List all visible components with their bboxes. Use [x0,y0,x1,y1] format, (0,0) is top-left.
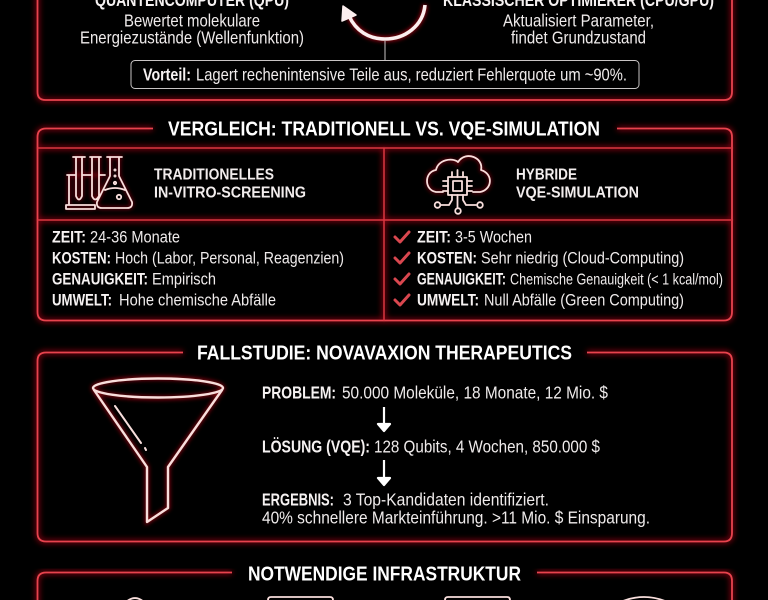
text: result: 3 Top-Kandidaten identifiziert. [343,490,549,510]
heading: hybrid simulation: HYBRIDE [516,166,577,184]
callout: advantage: Vorteil: [143,64,191,84]
arrow: problem to solution [378,407,390,431]
callout: advantage [131,60,639,88]
list: VQE facts: Chemische Genauigkeit (< 1 kcal/mol) [510,272,723,288]
text: solution: LÖSUNG (VQE): [262,436,370,456]
panel: infrastructure [38,562,732,600]
callout: advantage: Lagert rechenintensive Teile aus, reduziert Fehlerquote um ~90%. [196,64,627,84]
list: traditional facts: UMWELT: [52,292,112,310]
list: traditional facts: ZEIT: [52,228,86,246]
text: result: ERGEBNIS: [262,490,334,510]
text: problem: 50.000 Moleküle, 18 Monate, 12 Mio. $ [342,382,608,402]
icon: test tubes and flask [66,157,132,209]
heading: case study: FALLSTUDIE: NOVAVAXION THERAPEUTICS [197,342,572,364]
list: VQE facts: Null Abfälle (Green Computing) [484,290,684,310]
heading: traditional screening: TRADITIONELLES [154,166,274,184]
icon: check marks [395,232,409,305]
heading: hybrid simulation [516,166,639,202]
icon: funnel [93,378,223,522]
text: classical optimizer [443,0,714,48]
list: VQE facts: KOSTEN: [417,250,477,268]
icon: infrastructure tops [125,597,665,600]
list: traditional facts: Empirisch [152,270,216,288]
list: traditional facts: KOSTEN: [52,250,111,268]
heading: comparison: VERGLEICH: TRADITIONELL VS. VQE-SIMULATION [168,118,600,140]
text: quantum computer [80,0,304,48]
heading: traditional screening: IN-VITRO-SCREENING [154,184,306,202]
text: solution [262,436,600,456]
list: traditional facts [52,228,344,310]
text: result [262,490,650,528]
text: quantum computer: Bewertet molekulare [124,10,260,30]
text: quantum computer: Energiezustände (Wellenfunktion) [80,28,304,48]
list: traditional facts: Hohe chemische Abfälle [119,290,276,310]
list: traditional facts: Hoch (Labor, Personal, Reagenzien) [115,248,344,268]
panel: case study [38,342,732,542]
arrow: solution to result [378,460,390,485]
heading: traditional screening [154,166,306,202]
text: solution: 128 Qubits, 4 Wochen, 850.000 $ [374,436,600,456]
text: problem [262,382,608,402]
list: VQE facts: UMWELT: [417,292,479,310]
heading: infrastructure: NOTWENDIGE INFRASTRUKTUR [248,562,521,586]
text: result: 40% schnellere Markteinführung. >11 Mio. $ Einsparung. [262,508,650,528]
text: classical optimizer: findet Grundzustand [511,28,646,48]
list: VQE facts: GENAUIGKEIT: [417,270,506,288]
text: problem: PROBLEM: [262,382,336,402]
list: VQE facts: Sehr niedrig (Cloud-Computing) [481,248,684,268]
icon: cloud chip [427,156,490,214]
panel: hybrid VQE loop [38,0,732,100]
heading: hybrid simulation: VQE-SIMULATION [516,184,639,202]
panel: comparison [38,118,732,320]
text: classical optimizer: Aktualisiert Parameter, [503,10,654,30]
arrow: feedback loop [342,5,425,60]
list: VQE facts [417,228,723,310]
list: VQE facts: ZEIT: [417,228,451,246]
list: traditional facts: GENAUIGKEIT: [52,270,148,288]
list: traditional facts: 24-36 Monate [90,228,180,246]
list: VQE facts: 3-5 Wochen [455,228,532,246]
